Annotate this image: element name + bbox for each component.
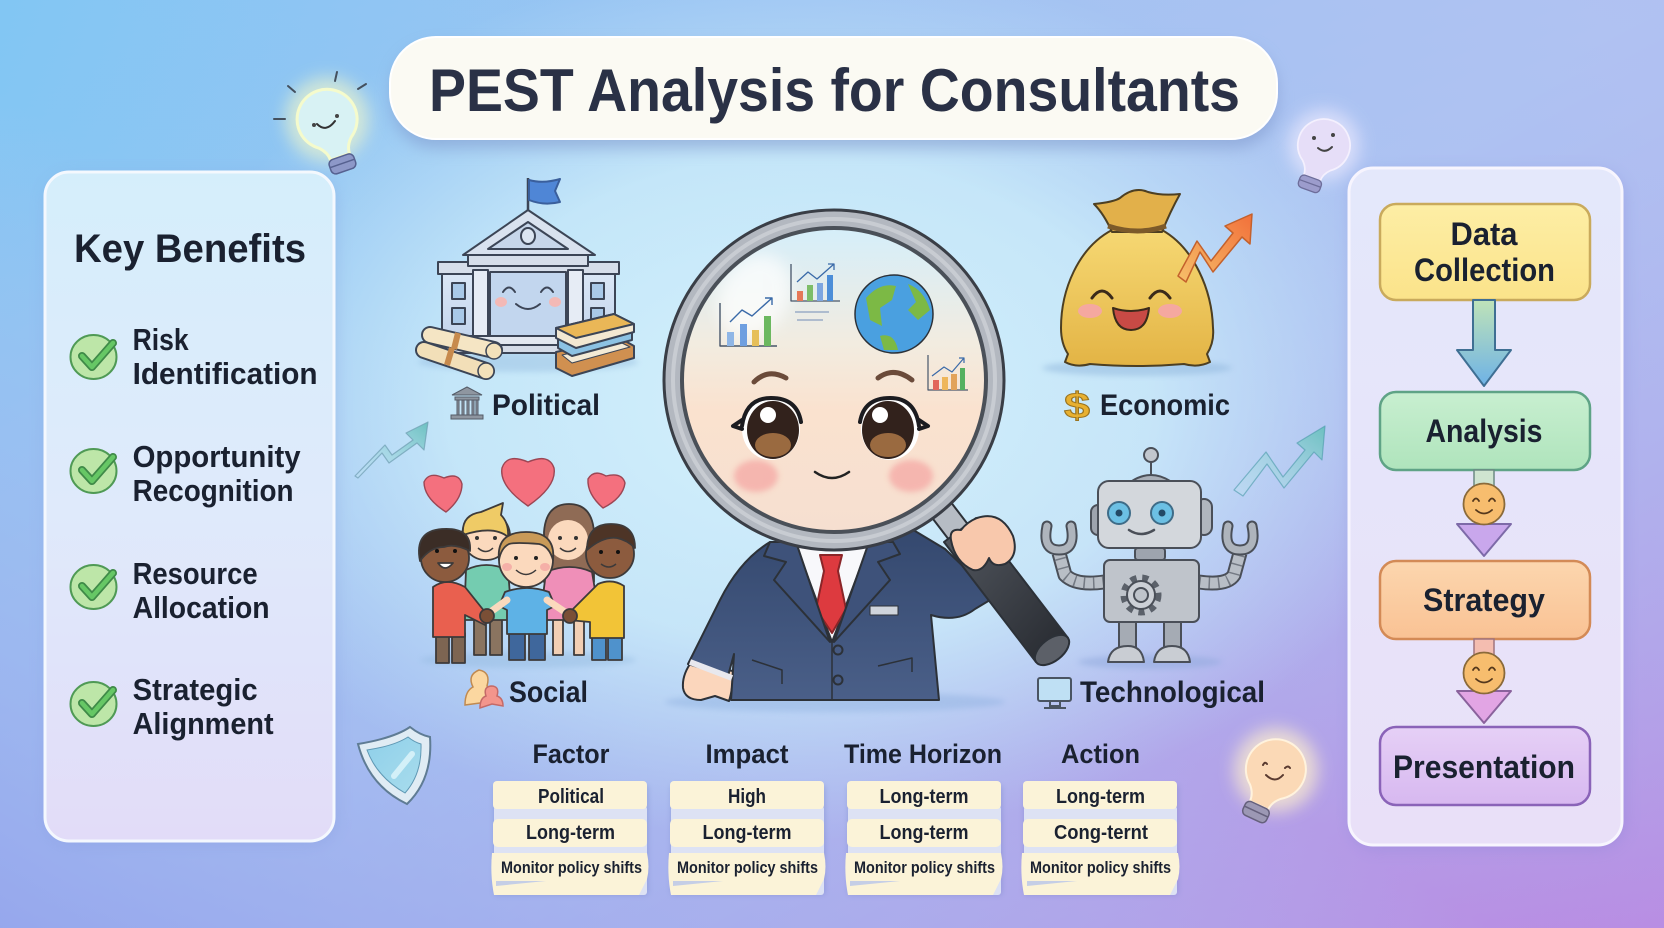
claws [1046,526,1253,550]
table: impact column: High [728,786,766,808]
table: action column: Long-term [1056,786,1145,808]
face: mouth [815,472,849,478]
benefit: strategic alignment: Strategic [133,672,258,707]
left hand [683,664,733,701]
arms [1059,553,1240,583]
arrow: strategy to presentation with smiley [1457,639,1511,723]
table: factor column: Monitor policy shifts [501,858,642,877]
illustration: political building [418,178,638,379]
heading: key benefits: Key Benefits [74,227,306,271]
arrow: right trend [1234,426,1325,496]
arrow: left trend [355,422,428,478]
benefit: resource allocation [70,556,270,625]
table: factor column: Long-term [526,822,615,844]
chart in lens: large [720,298,777,346]
label: technological: Technological [1080,676,1265,709]
table: action column: Action [1061,739,1140,769]
person: right friend [568,524,635,660]
table: action column: Cong-ternt [1054,822,1148,844]
arrow: data to analysis [1457,300,1511,386]
person: front [480,532,577,660]
table: time horizon column: Long-term [880,822,968,844]
person: girl [540,504,600,655]
step: data collection: Data [1450,216,1518,252]
face: eyes [733,398,928,460]
books [556,314,634,376]
globe in lens [855,275,933,353]
table: action column [1021,739,1180,895]
chart in lens: top [791,264,840,320]
table: impact column: Monitor policy shifts [677,858,818,877]
antenna [1150,462,1152,482]
benefit: strategic alignment [70,672,274,741]
table: impact column: Impact [706,739,789,769]
step: analysis [1380,392,1590,470]
step: presentation: Presentation [1393,749,1575,785]
illustration: money bag [1042,190,1252,376]
shirt [796,545,869,642]
benefit: strategic alignment: Alignment [133,706,274,741]
table: action column: Monitor policy shifts [1030,858,1171,877]
right hand [951,516,1015,570]
benefit: resource allocation: Allocation [133,590,270,625]
flag [527,178,529,210]
arrow: analysis to strategy with smiley [1457,470,1511,556]
icon: parliament [451,387,483,419]
title banner [390,37,1277,148]
label: economic [1064,385,1230,426]
label: political [451,387,600,422]
step: data collection: Collection [1414,252,1555,288]
icon: bulb top right [1283,109,1360,199]
label: economic: Economic [1100,389,1230,422]
benefit: opportunity recognition: Opportunity [133,439,301,474]
table: impact column: Long-term [702,822,792,844]
label: political: Political [492,389,600,422]
benefit: risk identification: Risk [133,322,189,357]
label: social [465,670,588,709]
table: time horizon column: Time Horizon [844,739,1002,769]
step: data collection [1380,204,1590,300]
body [1104,560,1199,622]
panel: process flow [1349,168,1624,848]
benefit: risk identification: Identification [133,356,318,391]
step: presentation [1380,727,1590,805]
arrow: growth [1178,214,1252,282]
ears [1091,505,1105,535]
step: strategy [1380,561,1590,639]
tie [816,555,846,633]
table: time horizon column [844,739,1002,895]
illustration: robot [1046,448,1253,669]
step: analysis: Analysis [1426,413,1542,449]
label: social: Social [509,676,588,709]
face: eyebrows [754,372,912,382]
panel: key benefits [45,172,336,844]
person: left friend [419,529,489,663]
table: factor column: Factor [532,739,610,769]
illustration: social group [419,459,636,668]
benefit: resource allocation: Resource [133,556,258,591]
table: time horizon column: Monitor policy shifts [854,858,995,877]
chart in lens: right [928,355,968,390]
table: factor column [491,739,648,895]
step: strategy: Strategy [1423,582,1545,618]
benefit: risk identification [70,322,318,391]
scrolls [424,333,502,379]
magnifier handle [930,501,1075,671]
table: time horizon column: Long-term [880,786,968,808]
jacket [688,519,995,700]
head [1098,481,1201,548]
hearts [502,459,554,506]
icon: glowing bulb top left [274,72,373,181]
table: factor column: Political [538,786,604,808]
legs [1119,622,1136,648]
illustration: consultant [664,210,1075,712]
icon: dollar: $ [1064,385,1090,426]
icon: shield [358,727,430,804]
table: impact column [668,739,826,895]
icon: monitor [1038,678,1071,708]
lapels [764,542,830,642]
benefit: opportunity recognition: Recognition [133,473,294,508]
gear [1124,578,1158,612]
lens [664,210,1004,550]
icon: people [465,670,503,708]
icon: bulb bottom right [1226,728,1318,832]
person: blond [462,503,512,655]
benefit: opportunity recognition [70,439,301,508]
title text: PEST Analysis for Consultants [429,57,1240,124]
